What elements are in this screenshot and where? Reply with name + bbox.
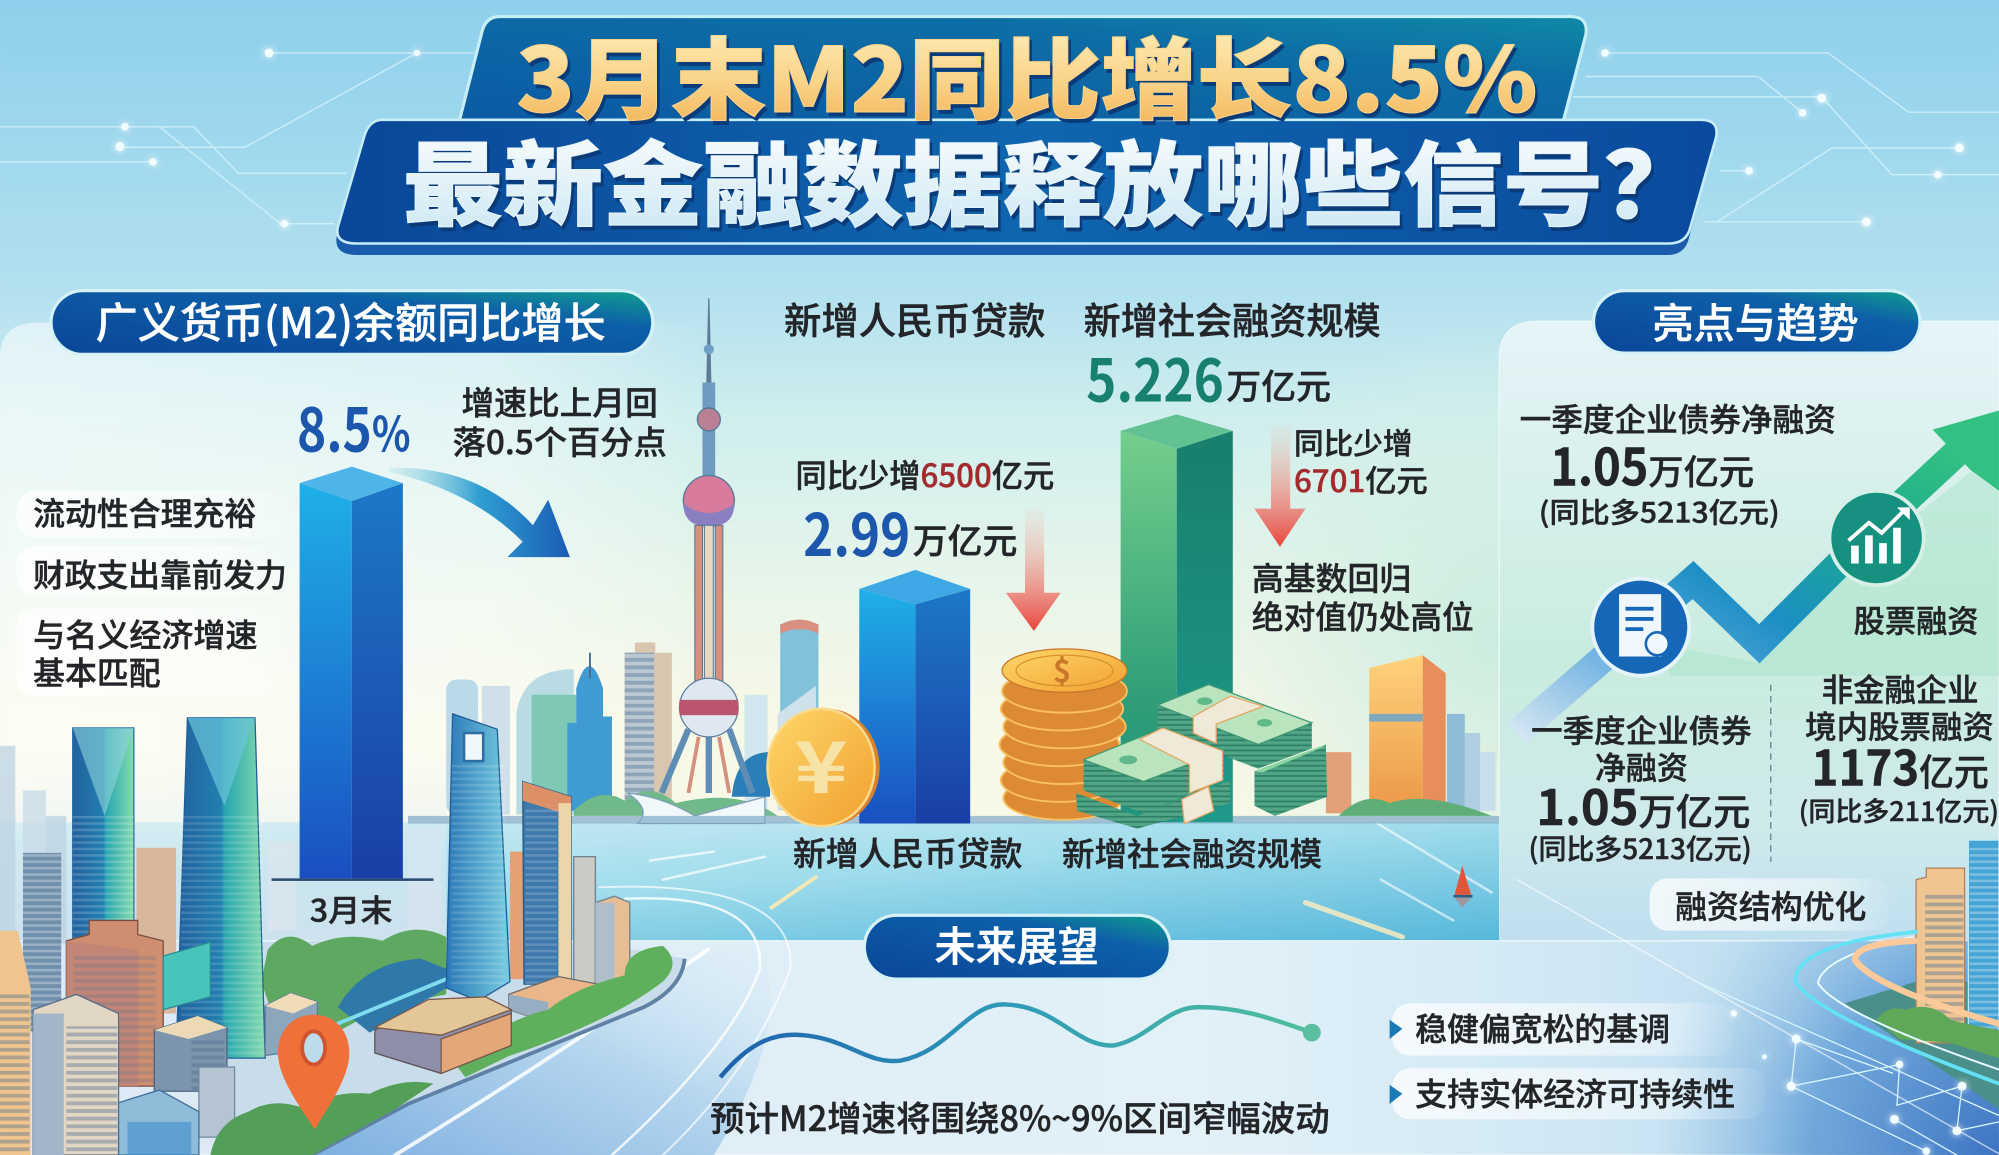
lower trees xyxy=(210,1082,433,1155)
label loans: 新增人民币贷款 xyxy=(793,829,1022,876)
dome hall xyxy=(732,752,770,797)
panel: right xyxy=(1499,321,1999,943)
bottom labels xyxy=(793,829,1322,876)
heading: outlook pill xyxy=(864,914,1170,979)
upper band xyxy=(1193,696,1263,743)
circuit lines left xyxy=(0,48,474,228)
blue water feature xyxy=(338,959,446,1033)
sailboat xyxy=(1453,866,1472,908)
upper stack xyxy=(1158,705,1312,769)
grey tower xyxy=(23,853,61,1031)
bar: M2 3D column xyxy=(272,467,433,931)
TSF section: 6701亿元 xyxy=(1294,457,1428,501)
title line 1: 3月末M2同比增长8.5% xyxy=(516,8,1537,138)
orange left block xyxy=(0,931,31,1155)
icon: yuan coin: ¥ xyxy=(794,710,848,814)
icon: map pin xyxy=(278,1015,349,1130)
bond value lower: 1.05万亿元 xyxy=(1536,769,1750,839)
highlights chart xyxy=(1517,410,1999,733)
chip nominal growth: 基本匹配 xyxy=(33,649,161,695)
red arrow loans xyxy=(1006,510,1061,631)
left city xyxy=(0,714,685,1155)
heading: highlights pill xyxy=(1594,291,1920,353)
blue block xyxy=(119,1090,199,1155)
road surface xyxy=(312,941,771,1155)
bottom right city and neon xyxy=(1699,840,1999,1155)
icon: yuan coin xyxy=(767,709,880,826)
title banner xyxy=(336,8,1717,255)
highlight: equity financing: 非金融企业 xyxy=(1822,666,1979,711)
teal sign xyxy=(163,942,210,1010)
river streaks xyxy=(395,822,1999,1155)
museum xyxy=(375,997,511,1073)
axis label: 3月末 xyxy=(310,887,393,931)
pill text: 广义货币(M2)余额同比增长 xyxy=(96,290,606,351)
highlight: bond financing top: 一季度企业债券净融资 xyxy=(1520,395,1836,441)
banner shape lower xyxy=(336,120,1717,255)
pill text: 亮点与趋势 xyxy=(1652,291,1859,350)
label: stock financing: 股票融资 xyxy=(1854,596,1979,641)
TSF section: 绝对值仍处高位 xyxy=(1252,592,1474,638)
shore trees xyxy=(574,791,778,816)
skyline behind tower xyxy=(408,620,1499,824)
loans unit: 万亿元 xyxy=(913,513,1017,563)
land strip xyxy=(217,937,685,1155)
equity value: 1173亿元 xyxy=(1812,729,1989,799)
loans 3D column xyxy=(859,570,970,824)
tower legs xyxy=(662,729,752,793)
chip nominal growth: 与名义经济增速 xyxy=(33,610,258,656)
icon: coin stack xyxy=(1000,647,1127,820)
haze behind left city xyxy=(0,752,446,943)
island land xyxy=(1845,982,1999,1109)
tower A xyxy=(73,728,134,950)
icon: stock chart xyxy=(1829,491,1924,585)
faded towers xyxy=(446,679,478,815)
heading: M2 pill xyxy=(51,290,653,354)
chip: real economy: 支持实体经济可持续性 xyxy=(1415,1069,1735,1115)
highlight: bond financing lower xyxy=(1529,706,1752,868)
label TSF: 新增社会融资规模 xyxy=(1062,829,1322,876)
chip liquidity: 流动性合理充裕 xyxy=(33,489,256,535)
highlight: bond financing top: 万亿元 xyxy=(1648,444,1754,494)
banner shape upper xyxy=(459,17,1586,122)
orange tower xyxy=(1916,868,1965,1043)
tower shafts xyxy=(695,525,702,683)
front stack xyxy=(1084,751,1224,813)
lower stack xyxy=(1076,780,1230,829)
water xyxy=(0,822,1499,943)
tan tower xyxy=(136,848,176,1013)
tower C xyxy=(446,714,510,1001)
TSF 3D column xyxy=(1121,414,1233,822)
tan back blocks xyxy=(510,852,525,979)
tower spire xyxy=(706,298,711,382)
panel: centre tint xyxy=(1186,324,1499,948)
curved arrow xyxy=(389,468,570,557)
heading: new loans: 新增人民币贷款 xyxy=(784,291,1045,345)
pill text: 未来展望 xyxy=(934,914,1099,973)
dashed divider xyxy=(1770,685,1772,862)
icon: coin stack: $ xyxy=(1053,647,1071,691)
glass tower xyxy=(1968,840,1999,1042)
network dots xyxy=(1699,983,1999,1155)
tower lower sphere xyxy=(680,678,738,737)
trees xyxy=(1877,1007,1999,1058)
note: growth rate xyxy=(453,377,667,464)
neon arcs xyxy=(1795,932,1999,1084)
note: growth rate: 增速比上月回 xyxy=(462,377,658,424)
axis line xyxy=(272,878,433,881)
TSF section xyxy=(1084,291,1474,822)
panel: outlook background xyxy=(0,941,1999,1155)
chip: financing structure: 融资结构优化 xyxy=(1675,882,1866,928)
heading: social financing: 新增社会融资规模 xyxy=(1084,291,1381,345)
left city background xyxy=(0,746,441,943)
lower band xyxy=(1182,787,1214,824)
outlook text: 预计M2增速将围绕8%~9%区间窄幅波动 xyxy=(710,1091,1330,1141)
domed tower xyxy=(567,666,612,811)
right skyline xyxy=(1326,655,1495,816)
highlight: bond financing top xyxy=(1520,395,1836,532)
chip: tone xyxy=(1390,1003,1734,1056)
shore trees xyxy=(453,946,673,1077)
loans section xyxy=(784,291,1061,824)
loans value: 2.99 xyxy=(803,488,910,573)
tan small block xyxy=(265,993,317,1056)
highlight: bond financing lower: 净融资 xyxy=(1595,743,1688,789)
circuit lines right xyxy=(1573,49,1999,226)
brick block xyxy=(66,920,163,1086)
TSF comment: 高基数回归 xyxy=(1252,554,1411,600)
chips: M2 drivers xyxy=(17,489,300,696)
bond delta: (同比多5213亿元) xyxy=(1539,491,1780,532)
bond delta lower: (同比多5213亿元) xyxy=(1529,827,1752,868)
bottom-right stack xyxy=(1254,745,1327,816)
oriental pearl tower xyxy=(662,298,752,793)
tower D xyxy=(523,781,571,984)
icon: cash stacks xyxy=(1076,685,1327,829)
tan towers xyxy=(625,643,672,807)
tower upper sphere xyxy=(683,476,734,527)
highlight: equity financing xyxy=(1799,666,1999,829)
front band xyxy=(1140,728,1223,793)
highlight: equity financing: 境内股票融资 xyxy=(1805,703,1994,748)
bullet xyxy=(1390,1020,1402,1039)
arrow head xyxy=(1933,410,1999,491)
TSF value: 5.226 xyxy=(1086,334,1224,419)
zigzag arrow xyxy=(1517,453,1957,733)
bullet xyxy=(1390,1085,1402,1104)
small grey block xyxy=(199,1067,235,1137)
sail-shaped venue xyxy=(627,793,765,824)
beige striped block xyxy=(33,994,119,1155)
TSF decrease note: 同比少增 xyxy=(1294,421,1413,463)
blue corner glow xyxy=(1632,941,1999,1155)
tower D base xyxy=(509,977,598,1022)
chip nominal growth xyxy=(17,608,300,696)
outlook wave line xyxy=(720,1004,1321,1077)
tower small sphere xyxy=(697,408,720,431)
shoreline xyxy=(408,816,1499,824)
light mountain area xyxy=(1657,472,1999,676)
tree belt xyxy=(261,930,446,1035)
panel: left background xyxy=(0,323,714,943)
chip: tone: 稳健偏宽松的基调 xyxy=(1415,1004,1670,1050)
icon: bond document xyxy=(1592,579,1689,676)
highlight: bond financing lower: 一季度企业债券 xyxy=(1531,706,1752,752)
title line 2: 最新金融数据释放哪些信号？ xyxy=(403,113,1703,245)
cylinder tower xyxy=(780,620,818,765)
loans decrease note: 同比少增6500亿元 xyxy=(796,451,1054,497)
M2 value: 8.5% xyxy=(297,383,411,469)
bond value: 1.05 xyxy=(1550,427,1648,501)
equity delta: (同比多211亿元) xyxy=(1799,790,1999,829)
tower B xyxy=(176,718,265,1058)
TSF unit: 万亿元 xyxy=(1226,359,1331,409)
note: growth rate: 落0.5个百分点 xyxy=(453,417,667,464)
red arrow TSF xyxy=(1254,426,1305,547)
grey-blue block xyxy=(154,1016,227,1091)
chip fiscal: 财政支出靠前发力 xyxy=(33,550,287,596)
